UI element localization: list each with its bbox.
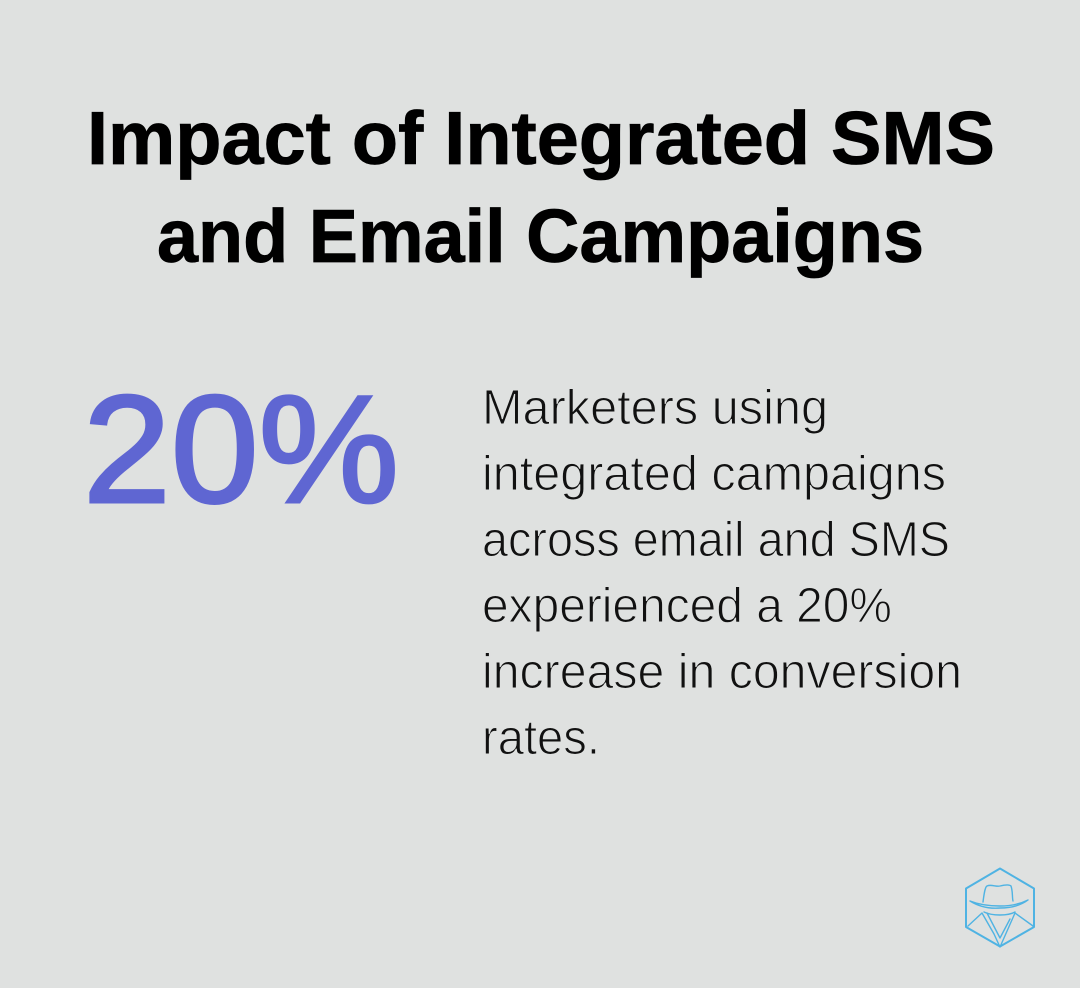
description text: increase in conversion: [482, 645, 962, 699]
description text: across email and SMS: [482, 513, 950, 567]
description text: [482, 381, 962, 765]
title: Impact of Integrated SMS: [87, 96, 995, 180]
title: and Email Campaigns: [157, 194, 924, 278]
icon: spy hat logo in hexagon: [966, 868, 1034, 947]
big statistic: 20%: 20%: [83, 364, 399, 535]
title: [87, 96, 995, 278]
description text: experienced a 20%: [482, 579, 892, 633]
description text: rates.: [482, 711, 600, 765]
description text: Marketers using: [482, 381, 828, 435]
description text: integrated campaigns: [482, 447, 946, 501]
